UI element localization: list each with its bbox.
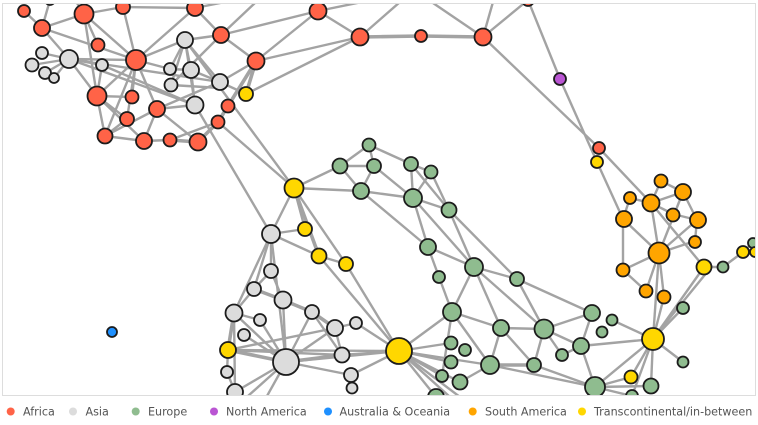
nodes: Australia and Oceania [107,327,117,337]
legend item: Africa [7,406,55,418]
legend item: Asia: Asia [86,406,109,418]
legend item: Australia and Oceania: Australia & Oceania [340,406,450,418]
legend item: South America: South America [485,406,567,418]
legend item: North America: North America [226,406,307,418]
nodes: Europe [332,138,758,405]
nodes: North America [554,73,566,85]
legend item: Asia [69,406,109,418]
legend item: Europe: Europe [148,406,187,418]
nodes: Asia [26,0,362,400]
nodes: Africa [18,0,605,154]
legend item: Africa: Africa [23,406,55,418]
legend [7,406,752,418]
legend item: Transcontinental: Transcontinental/in-between [593,406,752,418]
nodes: South America [616,174,706,304]
nodes: Transcontinental [220,87,758,384]
